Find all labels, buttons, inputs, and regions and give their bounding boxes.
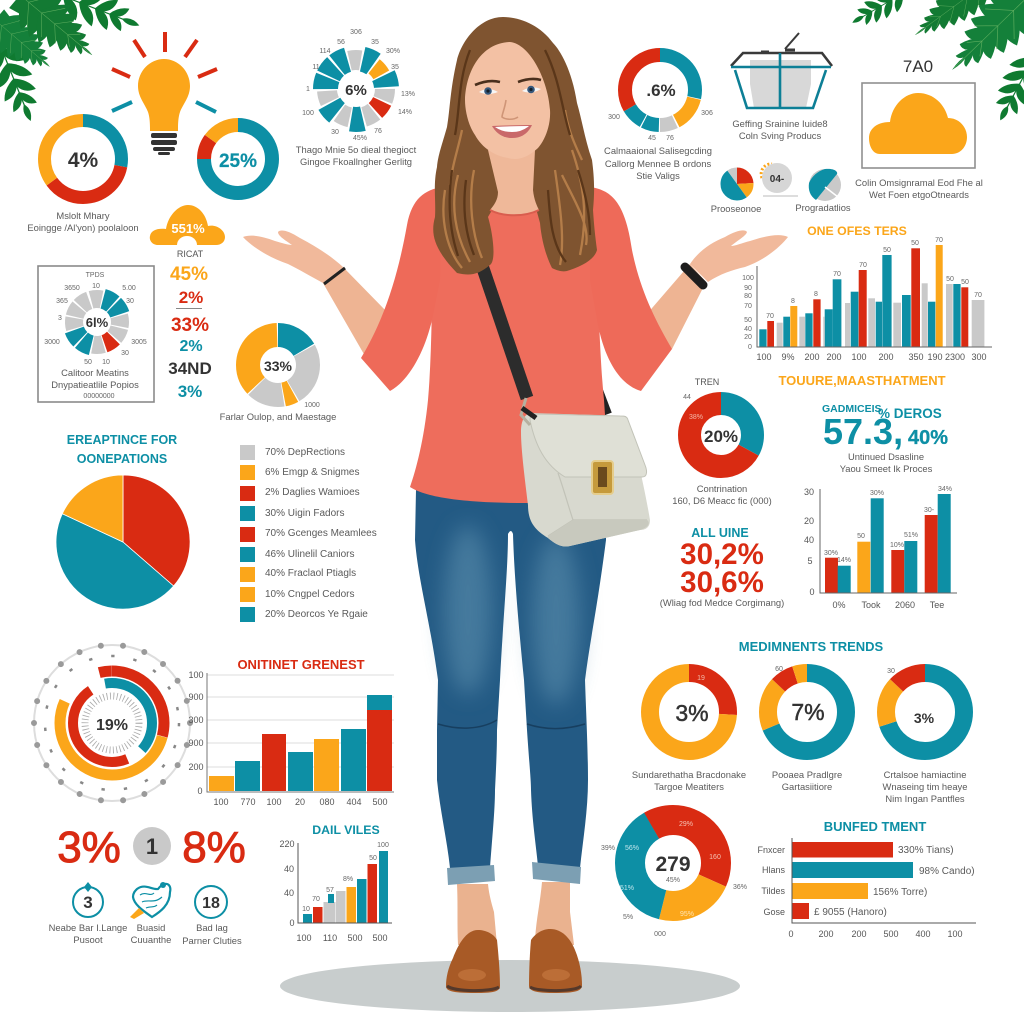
icon: number 18 <box>195 886 227 918</box>
donut trend 1: 19 <box>697 675 705 682</box>
panel: boxed wedge chart <box>38 266 154 402</box>
bar chart: ONE OFES TERS: 190 <box>927 352 943 362</box>
bar chart: red and teal pairs: 10% <box>890 542 904 549</box>
bar chart: red and teal pairs: 50 <box>857 533 865 540</box>
bar chart: DAIL VILES: 8% <box>343 876 353 883</box>
captions: donut trends <box>632 769 967 804</box>
wedge chart: 6%: 6% <box>345 82 367 99</box>
donut: 279: 29% <box>679 821 693 828</box>
wedge chart: 6%: 76 <box>374 128 382 135</box>
stat: ALL UINE: 30,2% <box>680 538 764 571</box>
mini pie right <box>795 169 851 213</box>
captions: donut trends: Pooaea Pradlgre <box>772 769 842 780</box>
panel: cloud box: 7A0 <box>903 57 933 76</box>
panel: boxed wedge chart: 30 <box>121 350 129 357</box>
bar chart: red and teal pairs: 20 <box>804 516 814 526</box>
bar chart: ONE OFES TERS: 70 <box>744 303 752 310</box>
caption: wedge chart 6%: Thago Mnie 5o dieal thegioct <box>296 144 417 155</box>
bar chart: red and teal pairs: 0 <box>809 587 815 597</box>
bar chart: ONITINET GRENEST: 500 <box>372 797 388 807</box>
horizontal bar chart: £ 9055 (Hanoro) <box>814 907 887 918</box>
jeans <box>415 490 606 868</box>
wedge chart: 6%: 35 <box>391 64 399 71</box>
big stats: 3% 1 8%: 8% <box>182 823 246 872</box>
shoes <box>446 929 582 993</box>
panel: boxed wedge chart: 3005 <box>131 339 147 346</box>
big stats: 3% 1 8%: 3% <box>57 823 121 872</box>
legend: 70% Gcenges Meamlees <box>265 528 377 539</box>
donut: 6% top right: 300 <box>608 114 620 121</box>
legend: 70% DepRections <box>265 447 345 458</box>
legend: 2% Daglies Wamioes <box>265 487 360 498</box>
captions: donut trends: Nim Ingan Pantfles <box>885 793 965 804</box>
mini gauge icon <box>761 163 798 196</box>
donut: 279: 39% <box>601 845 615 852</box>
donut: 279: 000 <box>654 931 666 938</box>
bar chart: ONE OFES TERS: 8 <box>814 291 818 298</box>
donut: 20% <box>683 377 752 466</box>
stat list: 2% <box>179 338 203 355</box>
caption: basket: Coln Sving Producs <box>739 130 821 141</box>
radial chart: 19%: 19% <box>96 717 128 734</box>
small cloud icon: 551% <box>171 221 205 236</box>
forearms <box>323 264 706 356</box>
person <box>243 17 788 993</box>
donut: 20%: TREN <box>695 377 719 387</box>
donut trend 2 <box>768 666 846 751</box>
stat: teal figures <box>822 403 948 474</box>
stat: teal figures: GADMICEIS <box>822 403 882 415</box>
caption: basket <box>732 118 828 141</box>
bar chart: DAIL VILES: 110 <box>323 933 337 943</box>
captions: icons: Parner Cluties <box>182 935 242 946</box>
donut: 33%: 1000 <box>304 402 320 409</box>
bar chart: red and teal pairs: 30% <box>824 550 838 557</box>
bar chart: ONE OFES TERS: 100 <box>742 275 754 282</box>
caption: donut 6% top right: Calmaaional Salisegcding <box>604 145 712 156</box>
panel: boxed wedge chart: 365 <box>56 298 68 305</box>
captions: icons: Pusoot <box>73 934 103 945</box>
wedge chart: 6%: 35 <box>371 39 379 46</box>
donut: 4% <box>44 120 122 198</box>
bar chart: ONE OFES TERS: 8 <box>791 298 795 305</box>
donut: 20%: 38% <box>689 414 703 421</box>
stat: teal figures: Yaou Smeet Ik Proces <box>840 463 933 474</box>
caption: basket: Geffing Srainine Iuide8 <box>732 118 828 129</box>
heading: pie chart: OONEPATIONS <box>77 452 167 466</box>
donut: 279: 160 <box>709 854 721 861</box>
stat: teal figures: % DEROS <box>878 406 942 421</box>
bar chart: ONE OFES TERS: 70 <box>935 237 943 244</box>
bar chart: ONE OFES TERS: 100 <box>756 352 772 362</box>
caption: wedge chart 6% <box>296 144 417 167</box>
bar chart: red and teal pairs: 0% <box>832 600 846 610</box>
donut: 279: 5% <box>623 914 633 921</box>
stat: ALL UINE: 30,6% <box>680 566 764 599</box>
bar chart: DAIL VILES: 500 <box>347 933 363 943</box>
captions: donut trends: Gartasiitiore <box>782 781 832 792</box>
bar chart: ONE OFES TERS: 0 <box>748 344 752 351</box>
bar chart: ONE OFES TERS: 70 <box>833 271 841 278</box>
hair <box>433 17 597 274</box>
donut: 279: 36% <box>733 884 747 891</box>
donut: 25% <box>204 125 272 193</box>
bracelets <box>324 268 345 284</box>
captions: donut trends: Sundarethatha Bracdonake <box>632 769 746 780</box>
bar chart: red and teal pairs: 5 <box>807 556 813 566</box>
captions: icons: Bad lag <box>196 922 228 933</box>
bar chart: red and teal pairs: Tee <box>930 600 944 610</box>
bar chart: ONE OFES TERS: 50 <box>883 247 891 254</box>
panel: boxed wedge chart: Calitoor Meatins <box>61 367 129 378</box>
caption: donut 6% top right: Stie Valigs <box>636 170 680 181</box>
donut: 6% top right: 45 <box>648 135 656 142</box>
pie chart <box>56 475 190 609</box>
bar chart: DAIL VILES: 100 <box>296 933 312 943</box>
bar chart: ONE OFES TERS: 50 <box>961 279 969 286</box>
donut trend 1: 3% <box>675 700 709 726</box>
bar chart: ONITINET GRENEST: 080 <box>319 797 335 807</box>
wedge chart: 6%: 306 <box>350 29 362 36</box>
bar chart: DAIL VILES <box>279 823 392 943</box>
donut trend 3: 3% <box>914 710 935 726</box>
shirt torso <box>410 181 610 503</box>
donut trend 3 <box>886 668 964 751</box>
donut: 279 <box>601 820 747 938</box>
bar chart: red and teal pairs: 34% <box>938 486 952 493</box>
horizontal bar chart: 200 <box>851 929 867 939</box>
donut: 33% <box>220 335 336 422</box>
captions: icons <box>49 922 242 946</box>
icon: basket <box>731 33 832 108</box>
cuffs <box>447 862 581 885</box>
panel: boxed wedge chart: 30 <box>126 298 134 305</box>
stat list: 34ND <box>168 359 212 378</box>
horizontal bar chart: Fnxcer <box>757 845 785 855</box>
stat list: 45% <box>170 264 208 285</box>
stat list: 3% <box>178 382 202 401</box>
caption: donut 4%: Mslolt Mhary <box>56 210 110 221</box>
hands <box>243 230 343 283</box>
bar chart: DAIL VILES: 10 <box>302 906 310 913</box>
bar chart: ONE OFES TERS: 200 <box>826 352 842 362</box>
donut: 279: 95% <box>680 911 694 918</box>
donut: 6% top right: 76 <box>666 135 674 142</box>
stat list: 33% <box>171 315 209 336</box>
panel: boxed wedge chart: 3650 <box>64 285 80 292</box>
horizontal bar chart: 98% Cando) <box>919 866 975 877</box>
caption: wedge chart 6%: Gingoe Fkoallngher Gerlitg <box>300 156 412 167</box>
bar chart: ONITINET GRENEST: 100 <box>213 797 229 807</box>
foliage top right <box>846 0 1024 129</box>
donut trend 2: 7% <box>791 699 825 725</box>
face <box>465 42 550 159</box>
bar chart: ONE OFES TERS: 90 <box>744 285 752 292</box>
legend: 6% Emgp & Snigmes <box>265 467 360 478</box>
bar chart: DAIL VILES: 100 <box>377 842 389 849</box>
panel: boxed wedge chart: TPDS <box>86 272 105 279</box>
heading: TOUURE,MAASTHATMENT: TOUURE,MAASTHATMENT <box>778 373 946 388</box>
bar chart: red and teal pairs: 51% <box>904 532 918 539</box>
wedge chart: 6%: 13% <box>401 91 415 98</box>
bar chart: ONITINET GRENEST: 300 <box>188 715 204 725</box>
panel: boxed wedge chart: 3000 <box>44 339 60 346</box>
bar chart: ONE OFES TERS: 70 <box>859 262 867 269</box>
donut: 279: 279 <box>655 853 691 876</box>
caption: donut 4% <box>27 210 139 233</box>
bar chart: ONITINET GRENEST: 20 <box>295 797 305 807</box>
bar chart: ONE OFES TERS: 40 <box>744 326 752 333</box>
captions: donut trends: Targoe Meatiters <box>654 781 724 792</box>
wedge chart: 6%: 114 <box>319 48 331 55</box>
big stats: 3% 1 8%: 1 <box>146 834 158 859</box>
radial chart: 19% <box>34 645 190 801</box>
panel: boxed wedge chart: 5.00 <box>122 285 136 292</box>
bar chart: DAIL VILES: 0 <box>289 918 295 928</box>
captions: icons: Cuuanthe <box>131 934 171 945</box>
heading: pie chart <box>67 433 177 466</box>
bar chart: ONE OFES TERS: 70 <box>974 292 982 299</box>
caption: donut 6% top right: Callorg Mennee B ordons <box>605 158 711 169</box>
handbag <box>521 398 650 547</box>
wedge chart: 6% <box>302 29 415 142</box>
wedge chart: 6%: 1 <box>306 86 310 93</box>
big stats: 3% 1 8% <box>57 823 246 872</box>
bar chart: red and teal pairs: 14% <box>837 557 851 564</box>
bar chart: DAIL VILES: 220 <box>279 839 295 849</box>
bar chart: DAIL VILES: DAIL VILES <box>312 823 380 837</box>
caption: donut 20% <box>672 483 772 506</box>
bar chart: ONE OFES TERS: 50 <box>744 317 752 324</box>
bar chart: ONE OFES TERS: 50 <box>946 276 954 283</box>
bar chart: red and teal pairs: 30 <box>804 487 814 497</box>
horizontal bar chart: 0 <box>788 929 794 939</box>
legend: 40% Fraclaol Ptiagls <box>265 568 356 579</box>
bar chart: ONE OFES TERS: 2300 <box>945 352 965 362</box>
wedge chart: 6%: 30 <box>331 129 339 136</box>
donut: 20%: 20% <box>704 427 738 446</box>
bar chart: ONITINET GRENEST: 200 <box>188 762 204 772</box>
donut trend 1 <box>650 673 728 751</box>
icon: brain <box>130 882 170 919</box>
donut: 33%: Farlar Oulop, and Maestage <box>220 411 336 422</box>
bar chart: ONE OFES TERS: 300 <box>971 352 987 362</box>
bar chart: ONE OFES TERS: 80 <box>744 293 752 300</box>
bar chart: red and teal pairs: Took <box>861 600 881 610</box>
mini pie left <box>711 176 761 214</box>
captions: icons: Neabe Bar I.Lange <box>49 922 127 933</box>
bar chart: ONE OFES TERS: 200 <box>878 352 894 362</box>
bar chart: ONE OFES TERS: 350 <box>908 352 924 362</box>
panel: boxed wedge chart: 10 <box>102 359 110 366</box>
stat list: RICAT <box>177 249 204 259</box>
icon: number 3: 3 <box>83 893 93 912</box>
bar chart: ONITINET GRENEST: 770 <box>240 797 256 807</box>
ankles <box>457 882 574 945</box>
bar chart: DAIL VILES: 500 <box>372 933 388 943</box>
ground shadow <box>280 960 740 1012</box>
donut: 279: 45% <box>666 877 680 884</box>
horizontal bar chart: 156% Torre) <box>873 887 927 898</box>
panel: boxed wedge chart: 10 <box>92 283 100 290</box>
bar chart: ONE OFES TERS: 50 <box>911 240 919 247</box>
bar chart: ONITINET GRENEST: 100 <box>188 670 204 680</box>
stat: ALL UINE: (Wliag fod Medce Corgimang) <box>660 597 784 608</box>
stat list: 2% <box>179 288 203 307</box>
wedge chart: 6%: 14% <box>398 109 412 116</box>
donut: 25%: 25% <box>219 151 257 172</box>
bar chart: DAIL VILES: 50 <box>369 855 377 862</box>
bar chart: red and teal pairs: 30% <box>870 490 884 497</box>
mini pie right: Progradatlios <box>795 202 851 213</box>
horizontal bar chart <box>757 838 976 939</box>
bar chart: ONE OFES TERS: 70 <box>766 313 774 320</box>
panel: boxed wedge chart: Dnypatieatlile Popios <box>51 379 139 390</box>
donut: 6% top right <box>608 55 713 142</box>
horizontal bar chart: 400 <box>915 929 931 939</box>
panel: cloud box <box>862 57 975 168</box>
small cloud icon <box>150 205 225 245</box>
heading: pie chart: EREAPTINCE FOR <box>67 433 177 447</box>
captions: icons: Buasid <box>137 922 165 933</box>
caption: cloud box <box>855 177 983 200</box>
donut: 20%: 44 <box>683 394 691 401</box>
panel: boxed wedge chart: 50 <box>84 359 92 366</box>
horizontal bar chart: Gose <box>763 907 785 917</box>
heading: MEDIMNENTS TRENDS: MEDIMNENTS TRENDS <box>739 639 884 654</box>
caption: donut 20%: 160, D6 Meacc fic (000) <box>672 495 772 506</box>
bar chart: ONITINET GRENEST: 404 <box>346 797 362 807</box>
donut: 4%: 4% <box>68 149 98 172</box>
stat: ALL UINE <box>660 526 784 608</box>
stat: teal figures: 40% <box>908 427 948 449</box>
wedge chart: 6%: 30% <box>386 48 400 55</box>
bar chart: DAIL VILES: 40 <box>284 888 294 898</box>
horizontal bar chart: 500 <box>883 929 899 939</box>
icon: number 3 <box>73 882 103 917</box>
legend: 10% Cngpel Cedors <box>265 589 354 600</box>
panel: boxed wedge chart: 6l% <box>86 315 109 330</box>
bar chart: ONITINET GRENEST <box>188 657 394 807</box>
donut: 279: 56% <box>625 845 639 852</box>
caption: donut 6% top right <box>604 145 712 181</box>
wedge chart: 6%: 45% <box>353 135 367 142</box>
legend: 30% Uigin Fadors <box>265 508 344 519</box>
legend: 20% Deorcos Ye Rgaie <box>265 609 368 620</box>
bar chart: DAIL VILES: 40 <box>284 864 294 874</box>
donut trend 3: 30 <box>887 668 895 675</box>
heading: BUNFED TMENT: BUNFED TMENT <box>824 819 926 834</box>
bar chart: red and teal pairs <box>804 486 957 610</box>
stat list <box>168 249 212 401</box>
donut: 279: 51% <box>620 885 634 892</box>
horizontal bar chart: 330% Tians) <box>898 845 954 856</box>
bar chart: ONE OFES TERS: 20 <box>744 334 752 341</box>
legend: 46% Ulinelil Caniors <box>265 549 354 560</box>
horizontal bar chart: 200 <box>818 929 834 939</box>
caption: cloud box: Colin Omsignramal Eod Fhe al <box>855 177 983 188</box>
neck <box>488 150 539 214</box>
heading: ONE OFES TERS: ONE OFES TERS <box>807 224 907 238</box>
bar chart: ONITINET GRENEST: 900 <box>188 738 204 748</box>
bar chart: ONE OFES TERS <box>742 237 992 362</box>
bar chart: red and teal pairs: 2060 <box>895 600 915 610</box>
bar chart: red and teal pairs: 40 <box>804 535 814 545</box>
bar chart: red and teal pairs: 30- <box>924 507 935 514</box>
bar chart: ONITINET GRENEST: ONITINET GRENEST <box>237 657 365 672</box>
wedge chart: 6%: 100 <box>302 110 314 117</box>
bar chart: ONITINET GRENEST: 900 <box>188 692 204 702</box>
bar chart: ONITINET GRENEST: 0 <box>197 786 203 796</box>
horizontal bar chart: 100 <box>947 929 963 939</box>
donut trend 2: 60 <box>775 666 783 673</box>
icon: number 18: 18 <box>202 895 220 912</box>
mini pie left: Prooseonoe <box>711 203 761 214</box>
bar chart: ONE OFES TERS: 9% <box>781 352 795 362</box>
shirt back strap <box>597 385 608 414</box>
bar chart: ONE OFES TERS: 100 <box>851 352 867 362</box>
wedge chart: 6%: 11 <box>312 64 320 71</box>
wedge chart: 6%: 56 <box>337 39 345 46</box>
stat: teal figures: Untinued Dsasline <box>848 451 924 462</box>
horizontal bar chart: Tildes <box>761 886 785 896</box>
stat: teal figures: 57.3, <box>823 411 903 452</box>
crossbody strap <box>472 236 527 398</box>
horizontal bar chart: Hlans <box>762 865 785 875</box>
captions: donut trends: Wnaseing tim heaye <box>883 781 967 792</box>
donut: 6% top right: 306 <box>701 110 713 117</box>
bar chart: DAIL VILES: 70 <box>312 896 320 903</box>
icon: light bulb <box>112 32 217 155</box>
bar chart: ONITINET GRENEST: 100 <box>266 797 282 807</box>
bar chart: ONE OFES TERS: 200 <box>804 352 820 362</box>
caption: donut 20%: Contrination <box>697 483 747 494</box>
sleeves <box>361 187 442 391</box>
donut: 6% top right: .6% <box>646 81 676 100</box>
mini gauge icon: 04- <box>770 174 784 185</box>
stat: ALL UINE: ALL UINE <box>691 526 749 540</box>
donut: 33%: 33% <box>264 358 293 374</box>
bar chart: DAIL VILES: 57 <box>326 887 334 894</box>
legend <box>240 445 377 622</box>
caption: cloud box: Wet Foen etgoOtneards <box>869 189 969 200</box>
panel: boxed wedge chart: 3 <box>58 315 62 322</box>
caption: donut 4%: Eoingge /Al'yon) poolaloon <box>27 222 139 233</box>
panel: boxed wedge chart: 00000000 <box>83 393 115 400</box>
captions: donut trends: Crtalsoe hamiactine <box>884 769 966 780</box>
foliage top left <box>0 0 146 128</box>
